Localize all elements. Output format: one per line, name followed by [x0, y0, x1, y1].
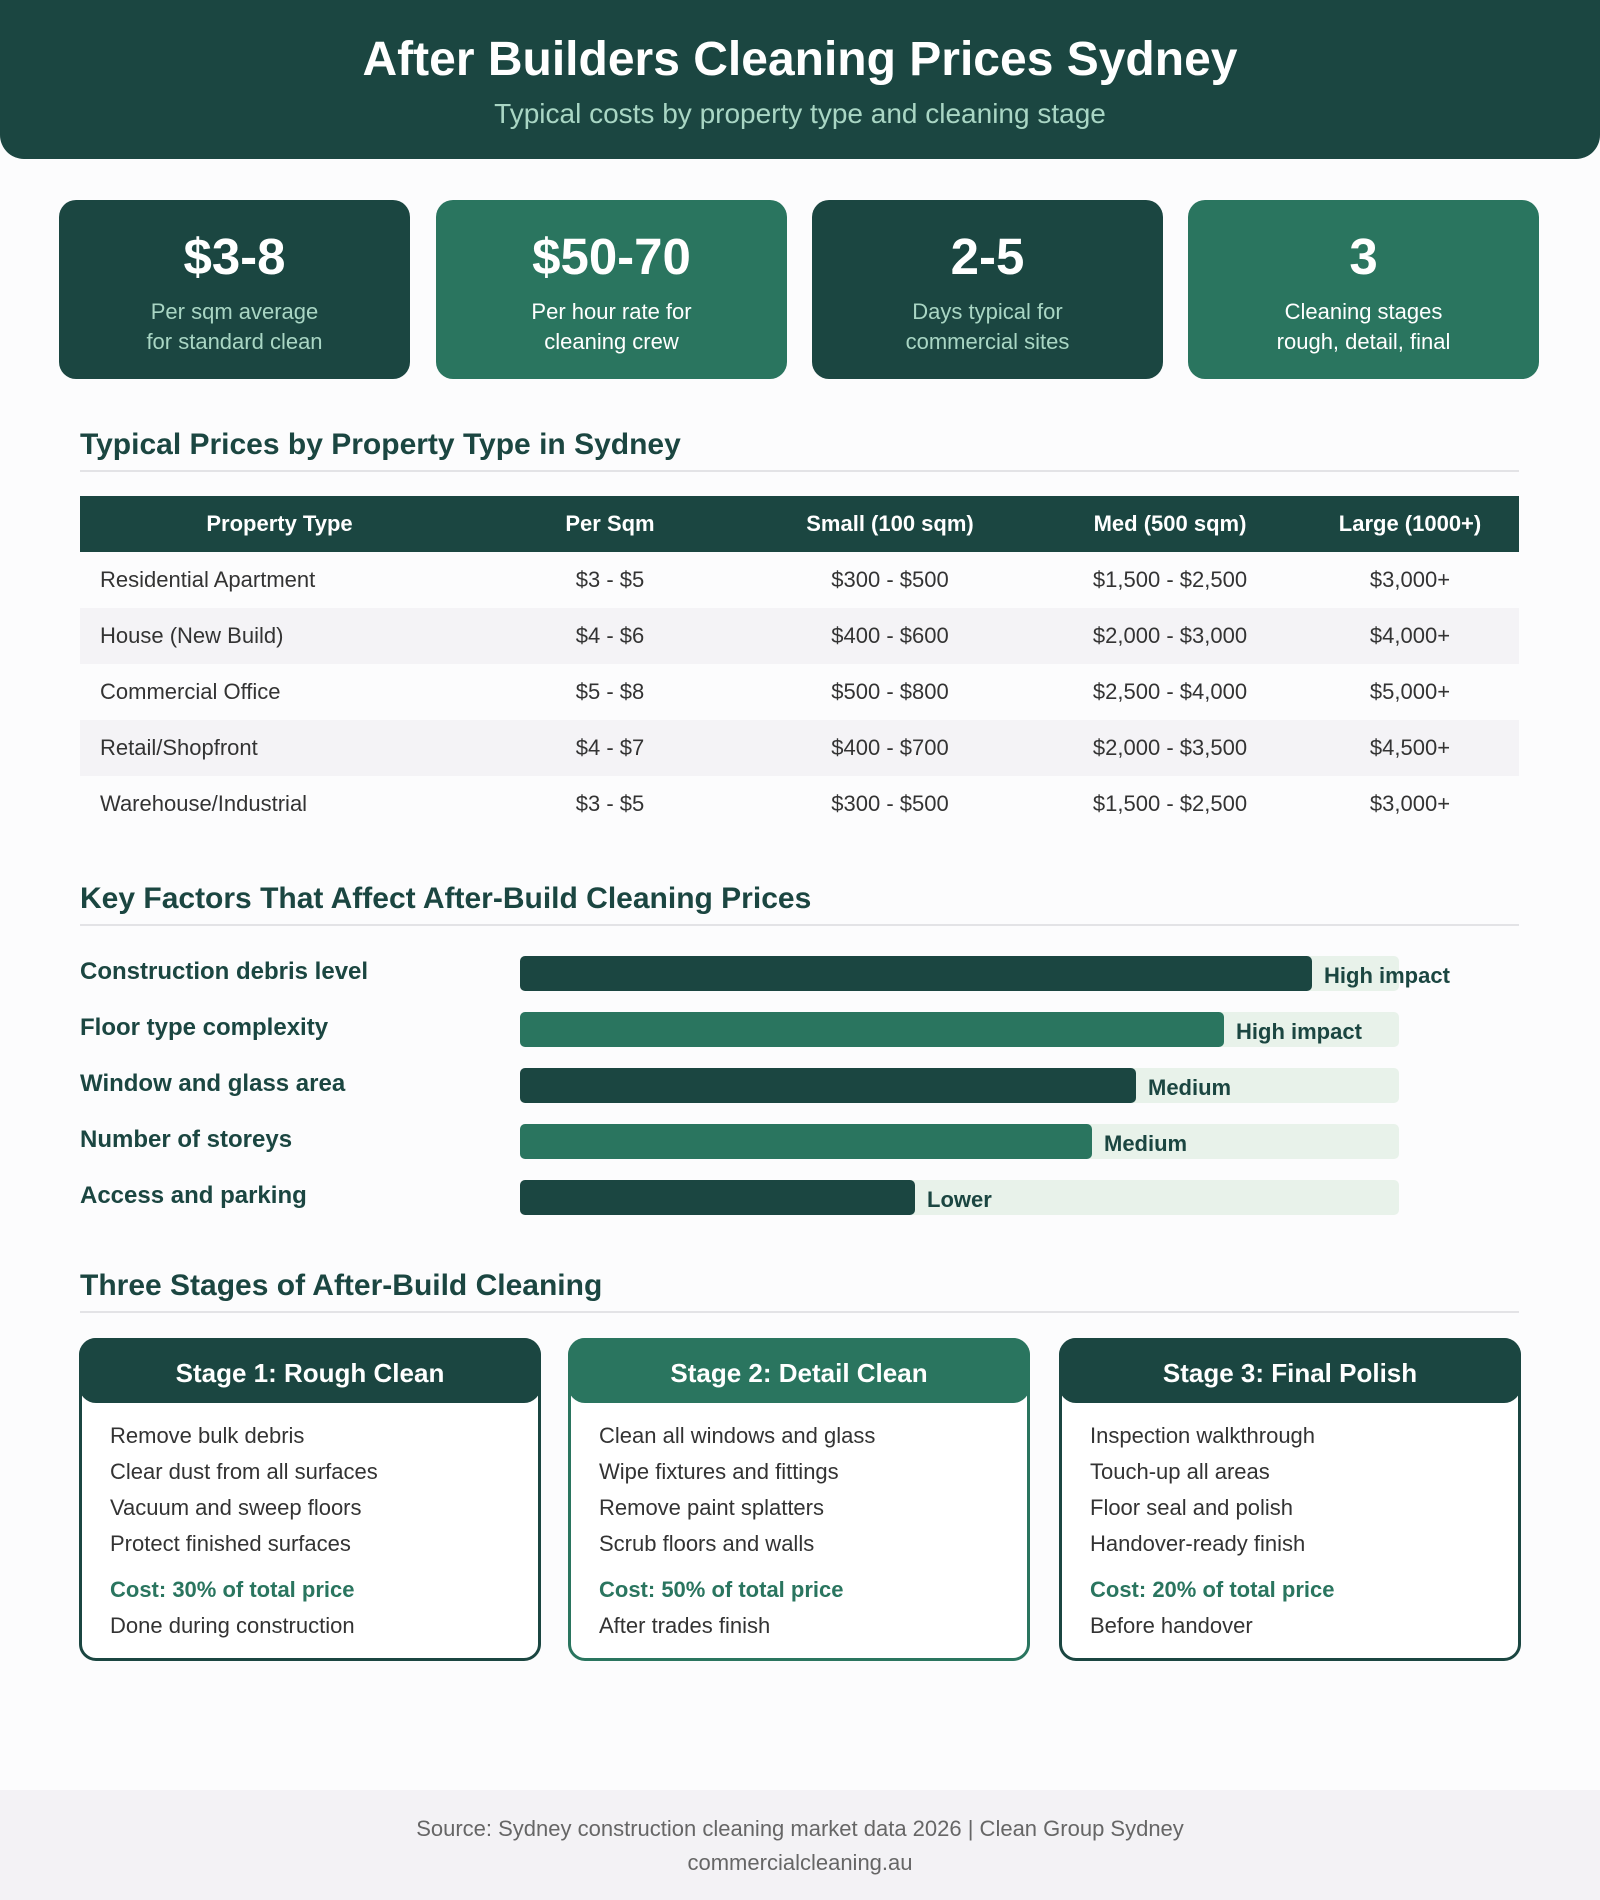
footer: Source: Sydney construction cleaning market data 2026 | Clean Group Sydney	[416, 1816, 1184, 1841]
stage 1 card: Done during construction	[110, 1613, 355, 1638]
stat card: stages	[1188, 200, 1539, 379]
stat card: stages: 3	[1349, 228, 1378, 285]
stage 1 card: Clear dust from all surfaces	[110, 1459, 378, 1484]
price table: $3 - $5	[576, 567, 644, 592]
factor label: window: Window and glass area	[80, 1070, 345, 1097]
price table: Commercial Office	[100, 679, 281, 704]
factor label: floor: Floor type complexity	[80, 1014, 328, 1041]
stat card: per sqm	[59, 200, 410, 379]
price table: $4 - $7	[576, 735, 644, 760]
price table: Property Type	[206, 511, 353, 536]
stage 3 card: Cost: 20% of total price	[1090, 1577, 1334, 1602]
bar: access	[520, 1180, 1399, 1215]
price table: $1,500 - $2,500	[1093, 791, 1247, 816]
stage 3 card	[1059, 1338, 1521, 1661]
stat card: per sqm: for standard clean	[146, 329, 323, 354]
bar: storeys: Medium	[1104, 1131, 1187, 1156]
price table: $2,000 - $3,000	[1093, 623, 1247, 648]
stage 2 card: Stage 2: Detail Clean	[670, 1358, 928, 1388]
footer	[0, 1790, 1600, 1900]
stage 2 card	[568, 1338, 1030, 1661]
bar: floor: High impact	[1236, 1019, 1362, 1044]
stage 2 card: Cost: 50% of total price	[599, 1577, 843, 1602]
price table: $2,500 - $4,000	[1093, 679, 1247, 704]
stage 2 card: Remove paint splatters	[599, 1495, 824, 1520]
price table: $3,000+	[1370, 791, 1450, 816]
price table: $4,500+	[1370, 735, 1450, 760]
heading: prices table	[80, 428, 1519, 472]
stat card: days: 2-5	[951, 228, 1024, 285]
heading: stages: Three Stages of After-Build Cleaning	[80, 1269, 602, 1302]
stage 3 card: Floor seal and polish	[1090, 1495, 1293, 1520]
bar: access: Lower	[927, 1187, 992, 1212]
bar: debris	[520, 956, 1399, 991]
stage 1 card: Vacuum and sweep floors	[110, 1495, 362, 1520]
price table: $3,000+	[1370, 567, 1450, 592]
price table: $500 - $800	[831, 679, 949, 704]
stat card: per sqm: Per sqm average	[151, 299, 318, 324]
price table: $5,000+	[1370, 679, 1450, 704]
stage 2 card: Wipe fixtures and fittings	[599, 1459, 839, 1484]
bar: storeys	[520, 1124, 1399, 1159]
bar: floor	[520, 1012, 1399, 1047]
stage 2 card: Scrub floors and walls	[599, 1531, 814, 1556]
factor label: storeys: Number of storeys	[80, 1126, 292, 1153]
price table: Residential Apartment	[100, 567, 315, 592]
price table: Warehouse/Industrial	[100, 791, 307, 816]
subtitle: Typical costs by property type and cleaning stage	[494, 98, 1106, 129]
price table: Large (1000+)	[1339, 511, 1481, 536]
stage 2 card: Clean all windows and glass	[599, 1423, 875, 1448]
stage 1 card: Protect finished surfaces	[110, 1531, 351, 1556]
price table: $400 - $600	[831, 623, 949, 648]
heading: key factors	[80, 882, 1519, 926]
stage 3 card: Touch-up all areas	[1090, 1459, 1270, 1484]
price table: $400 - $700	[831, 735, 949, 760]
heading: prices table: Typical Prices by Property Type in Sydney	[80, 428, 681, 461]
bar: window: Medium	[1148, 1075, 1231, 1100]
heading: key factors: Key Factors That Affect After-Build Cleaning Prices	[80, 882, 811, 915]
price table: Retail/Shopfront	[100, 735, 258, 760]
price table: House (New Build)	[100, 623, 283, 648]
price table: $3 - $5	[576, 791, 644, 816]
stat card: days	[812, 200, 1163, 379]
stage 1 card	[79, 1338, 541, 1661]
title: After Builders Cleaning Prices Sydney	[363, 33, 1237, 86]
stat card: hourly: Per hour rate for	[531, 299, 692, 324]
stat card: per sqm: $3-8	[183, 228, 286, 285]
price table	[80, 496, 1519, 816]
price table: Per Sqm	[565, 511, 655, 536]
stage 3 card: Before handover	[1090, 1613, 1253, 1638]
stat card: stages: Cleaning stages	[1285, 299, 1442, 324]
stage 2 card: After trades finish	[599, 1613, 770, 1638]
price table: Small (100 sqm)	[806, 511, 974, 536]
price table: $2,000 - $3,500	[1093, 735, 1247, 760]
stage 3 card: Stage 3: Final Polish	[1163, 1358, 1417, 1388]
price table: $1,500 - $2,500	[1093, 567, 1247, 592]
bar: window	[520, 1068, 1399, 1103]
factor label: debris: Construction debris level	[80, 958, 368, 985]
stage 1 card: Stage 1: Rough Clean	[176, 1358, 444, 1388]
stage 3 card: Inspection walkthrough	[1090, 1423, 1315, 1448]
price table: $300 - $500	[831, 567, 949, 592]
stat card: hourly	[436, 200, 787, 379]
price table: $4 - $6	[576, 623, 644, 648]
price table: $4,000+	[1370, 623, 1450, 648]
price table: $5 - $8	[576, 679, 644, 704]
stage 1 card: Remove bulk debris	[110, 1423, 304, 1448]
stat card: hourly: cleaning crew	[544, 329, 679, 354]
stat card: days: commercial sites	[906, 329, 1069, 354]
price table: $300 - $500	[831, 791, 949, 816]
stage 1 card: Cost: 30% of total price	[110, 1577, 354, 1602]
footer: commercialcleaning.au	[688, 1850, 912, 1875]
stat card: days: Days typical for	[912, 299, 1063, 324]
stage 3 card: Handover-ready finish	[1090, 1531, 1305, 1556]
stat card: stages: rough, detail, final	[1277, 329, 1450, 354]
header	[0, 0, 1600, 159]
price table: Med (500 sqm)	[1094, 511, 1246, 536]
stat card: hourly: $50-70	[532, 228, 691, 285]
heading: stages	[80, 1269, 1519, 1313]
factor label: access: Access and parking	[80, 1182, 307, 1209]
bar: debris: High impact	[1324, 963, 1450, 988]
